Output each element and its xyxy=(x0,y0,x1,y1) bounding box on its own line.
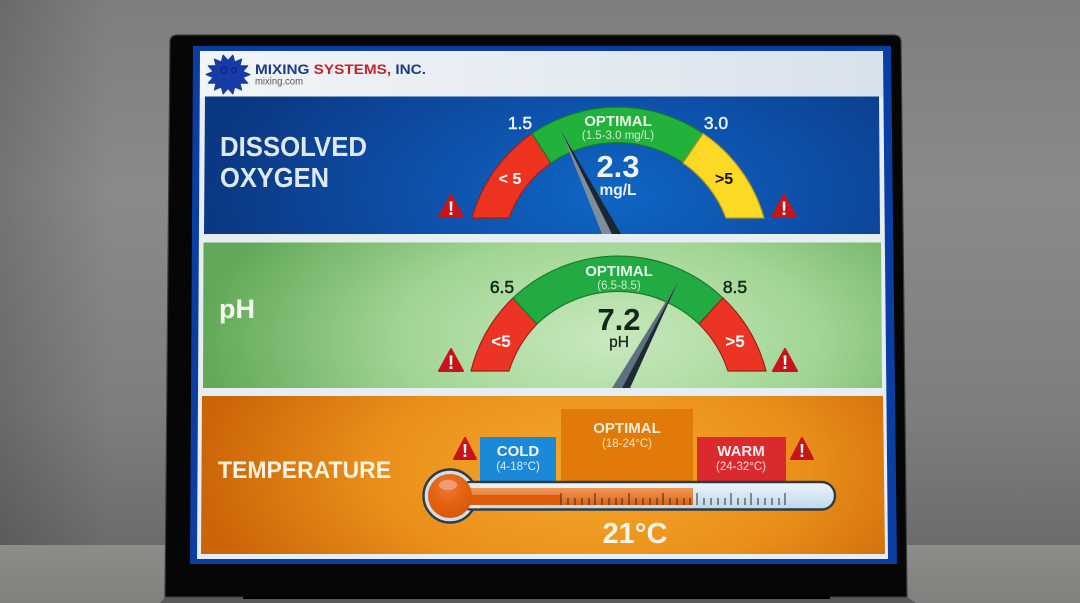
heading: dissolved oxygen: OXYGEN xyxy=(220,162,329,193)
low zone xyxy=(471,298,537,371)
low zone xyxy=(472,134,551,218)
company name: MIXING SYSTEMS, INC. xyxy=(255,61,426,77)
range block: cold: (4-18°C) xyxy=(496,461,540,473)
optimal label: OPTIMAL xyxy=(584,113,652,130)
icon: warning left xyxy=(439,195,463,220)
unit: mg/L xyxy=(599,182,637,199)
optimal zone xyxy=(513,256,723,324)
icon: warning right xyxy=(773,349,797,374)
icon: warning left: ! xyxy=(448,199,454,220)
thermometer xyxy=(424,470,835,522)
range block: warm: WARM xyxy=(717,443,765,460)
icon: warning left xyxy=(439,349,463,374)
current temperature: 21°C xyxy=(602,518,668,550)
icon: warning left xyxy=(454,438,476,461)
panel: pH xyxy=(203,242,882,388)
needle xyxy=(561,131,621,234)
gauge: dissolved oxygen xyxy=(439,107,796,234)
high label: >5 xyxy=(715,171,733,188)
website: mixing.com xyxy=(255,76,303,88)
range block: optimal xyxy=(561,409,693,482)
icon: warning right: ! xyxy=(781,199,787,220)
icon: warning left: ! xyxy=(462,441,468,461)
heading: temperature: TEMPERATURE xyxy=(218,457,391,484)
laptop body xyxy=(160,35,916,603)
range block: cold: COLD xyxy=(497,443,539,460)
range block: cold xyxy=(480,437,556,482)
unit: pH xyxy=(609,334,629,351)
icon: warning right xyxy=(772,195,796,220)
value: 2.3 xyxy=(596,149,640,184)
gauge: pH xyxy=(439,256,797,388)
scale ticks xyxy=(561,493,785,505)
high zone xyxy=(683,134,764,218)
optimal range: (6.5-8.5) xyxy=(597,280,641,292)
icon: warning right: ! xyxy=(782,353,788,374)
optimal range: (1.5-3.0 mg/L) xyxy=(582,130,654,142)
icon: warning right xyxy=(791,438,813,461)
range block: optimal: (18-24°C) xyxy=(602,438,652,450)
range block: optimal: OPTIMAL xyxy=(593,420,661,437)
needle xyxy=(612,282,678,388)
scale label low: 6.5 xyxy=(490,277,514,297)
heading: pH: pH xyxy=(219,294,255,324)
low label: <5 xyxy=(491,332,511,351)
header logo xyxy=(206,55,426,94)
high zone xyxy=(699,298,766,371)
panel: temperature xyxy=(201,396,885,554)
scale label high: 8.5 xyxy=(723,277,747,297)
heading: dissolved oxygen: DISSOLVED xyxy=(220,131,367,162)
desk surface xyxy=(0,545,1080,603)
scale label low: 1.5 xyxy=(508,113,532,133)
scale label high: 3.0 xyxy=(704,113,728,133)
high label: >5 xyxy=(725,332,745,351)
panel: dissolved oxygen xyxy=(204,96,880,234)
range block: warm xyxy=(697,437,786,482)
screen frame xyxy=(190,46,897,564)
icon: gear logo xyxy=(206,55,250,94)
value: 7.2 xyxy=(597,302,641,337)
optimal zone xyxy=(532,107,703,163)
icon: warning left: ! xyxy=(448,353,454,374)
icon: warning right: ! xyxy=(799,441,805,461)
low label: < 5 xyxy=(499,171,521,188)
optimal label: OPTIMAL xyxy=(585,263,653,280)
range block: warm: (24-32°C) xyxy=(716,461,766,473)
